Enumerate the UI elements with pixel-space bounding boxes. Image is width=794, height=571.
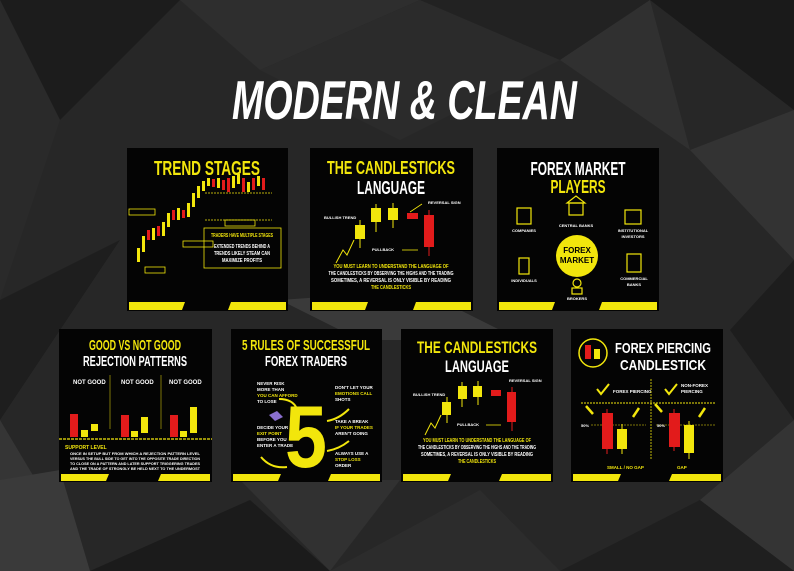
description <box>418 438 536 465</box>
rules text: MORE THAN <box>257 387 284 392</box>
card: rejection patterns <box>59 329 212 482</box>
card: candlesticks language (top) <box>310 148 473 311</box>
rules text <box>257 381 373 468</box>
icon: gem <box>269 411 283 421</box>
card: forex market players: COMPANIES <box>512 228 536 233</box>
description: TO CLOSE ON A PATTERN AND LATER SUPPORT TRIGGERING TRADES <box>70 461 200 466</box>
rules text: BEFORE YOU <box>257 437 287 442</box>
rules text: ALWAYS USE A <box>335 451 369 456</box>
comparison chart: SMALL / NO GAP <box>607 465 644 470</box>
card: forex market players <box>497 148 659 311</box>
comparison chart: GAP <box>677 465 687 470</box>
card: trend stages <box>127 148 288 311</box>
center circle <box>556 235 598 277</box>
description <box>328 264 454 291</box>
footer <box>312 302 471 310</box>
rules text: STOP LOSS <box>335 457 361 462</box>
center circle: MARKET <box>560 256 594 265</box>
footer <box>61 474 210 481</box>
rules text: EMOTIONS CALL <box>335 391 372 396</box>
chart: trend candles <box>137 174 272 262</box>
card: forex market players: INSTITUTIONAL <box>618 228 649 233</box>
text box: MAXIMIZE PROFITS <box>222 258 263 264</box>
rules text: ENTER A TRADE <box>257 443 293 448</box>
card: forex market players: INDIVIDUALS <box>511 278 537 283</box>
chart: candles: PULLBACK <box>372 247 394 252</box>
description: SOMETIMES, A REVERSAL IS ONLY VISIBLE BY READING <box>331 278 451 284</box>
comparison chart: FOREX PIERCING <box>613 389 652 394</box>
description: VERSUS THE BULL SIDE TO GET INTO THE OPPOSITE TRADE DIRECTION <box>70 456 200 461</box>
description: AND THE TRADE OF STRONGLY BE HELD NEXT TO THE UNDERMOST <box>70 466 201 471</box>
chart: PULLBACK <box>457 422 479 427</box>
arrows <box>261 399 349 467</box>
comparison chart: PIERCING <box>681 389 703 394</box>
rules text: EXIT POINT <box>257 431 282 436</box>
card: forex market players: INVESTORS <box>621 234 645 239</box>
card: forex market players: PLAYERS <box>550 177 606 197</box>
comparison chart: 50% <box>581 423 589 428</box>
rules text: SHOTS <box>335 397 351 402</box>
rules text: IF YOUR TRADES <box>335 425 373 430</box>
description: THE CANDLESTICKS <box>458 459 496 465</box>
rules text: TO LOSE <box>257 399 277 404</box>
card: candlesticks language (bottom): LANGUAGE <box>445 357 509 376</box>
card: forex market players: CENTRAL BANKS <box>559 223 594 228</box>
chart: BULLISH TREND <box>413 392 445 397</box>
card: forex market players: BROKERS <box>567 296 587 301</box>
chart: candles: BULLISH TREND <box>324 215 356 220</box>
card: candlesticks language (top): LANGUAGE <box>357 178 425 198</box>
footer <box>403 474 551 481</box>
rules text: TAKE A BREAK <box>335 419 369 424</box>
footer <box>129 302 286 310</box>
columns of candles: NOT GOOD <box>121 380 154 386</box>
footer <box>233 474 380 481</box>
columns of candles: NOT GOOD <box>73 380 106 386</box>
rules text: YOU CAN AFFORD <box>257 393 298 398</box>
card: candlesticks language (bottom) <box>401 329 553 482</box>
footer <box>573 474 721 481</box>
rules text: DON'T LET YOUR <box>335 385 373 390</box>
rules text: ORDER <box>335 463 352 468</box>
description: ONCE IN SETUP BUT FROM WHICH A REJECTION PATTERN LEVEL <box>70 451 201 456</box>
text box: TRENDS LIKELY STEAM CAN <box>214 251 270 257</box>
chart: candles: REVERSAL SIGN <box>428 200 461 205</box>
columns of candles <box>59 375 212 451</box>
comparison chart: 50% <box>657 423 665 428</box>
comparison chart: NON-FOREX <box>681 383 708 388</box>
description <box>70 451 201 471</box>
center circle: FOREX <box>563 246 591 255</box>
card: forex market players: BANKS <box>627 282 641 287</box>
columns of candles: NOT GOOD <box>169 380 202 386</box>
rules text: AREN'T GOING <box>335 431 368 436</box>
card: 5 rules <box>231 329 382 482</box>
footer <box>499 302 657 310</box>
rules text: DECIDE YOUR <box>257 425 289 430</box>
chart <box>413 378 542 435</box>
card: piercing candlestick <box>571 329 723 482</box>
description: YOU MUST LEARN TO UNDERSTAND THE LANGUAGE OF <box>334 264 448 270</box>
label boxes <box>129 209 255 273</box>
rules text: NEVER RISK <box>257 381 285 386</box>
comparison chart <box>581 379 716 470</box>
text box <box>204 228 281 268</box>
icons <box>517 196 641 294</box>
icon: candle circle <box>579 339 607 367</box>
text box: EXTENDED TRENDS BEHIND A <box>214 244 270 250</box>
chart: candles <box>324 200 461 263</box>
columns of candles: SUPPORT LEVEL <box>65 445 107 451</box>
card: forex market players: COMMERCIAL <box>620 276 648 281</box>
description: THE CANDLESTICKS <box>371 285 412 291</box>
chart: REVERSAL SIGN <box>509 378 542 383</box>
